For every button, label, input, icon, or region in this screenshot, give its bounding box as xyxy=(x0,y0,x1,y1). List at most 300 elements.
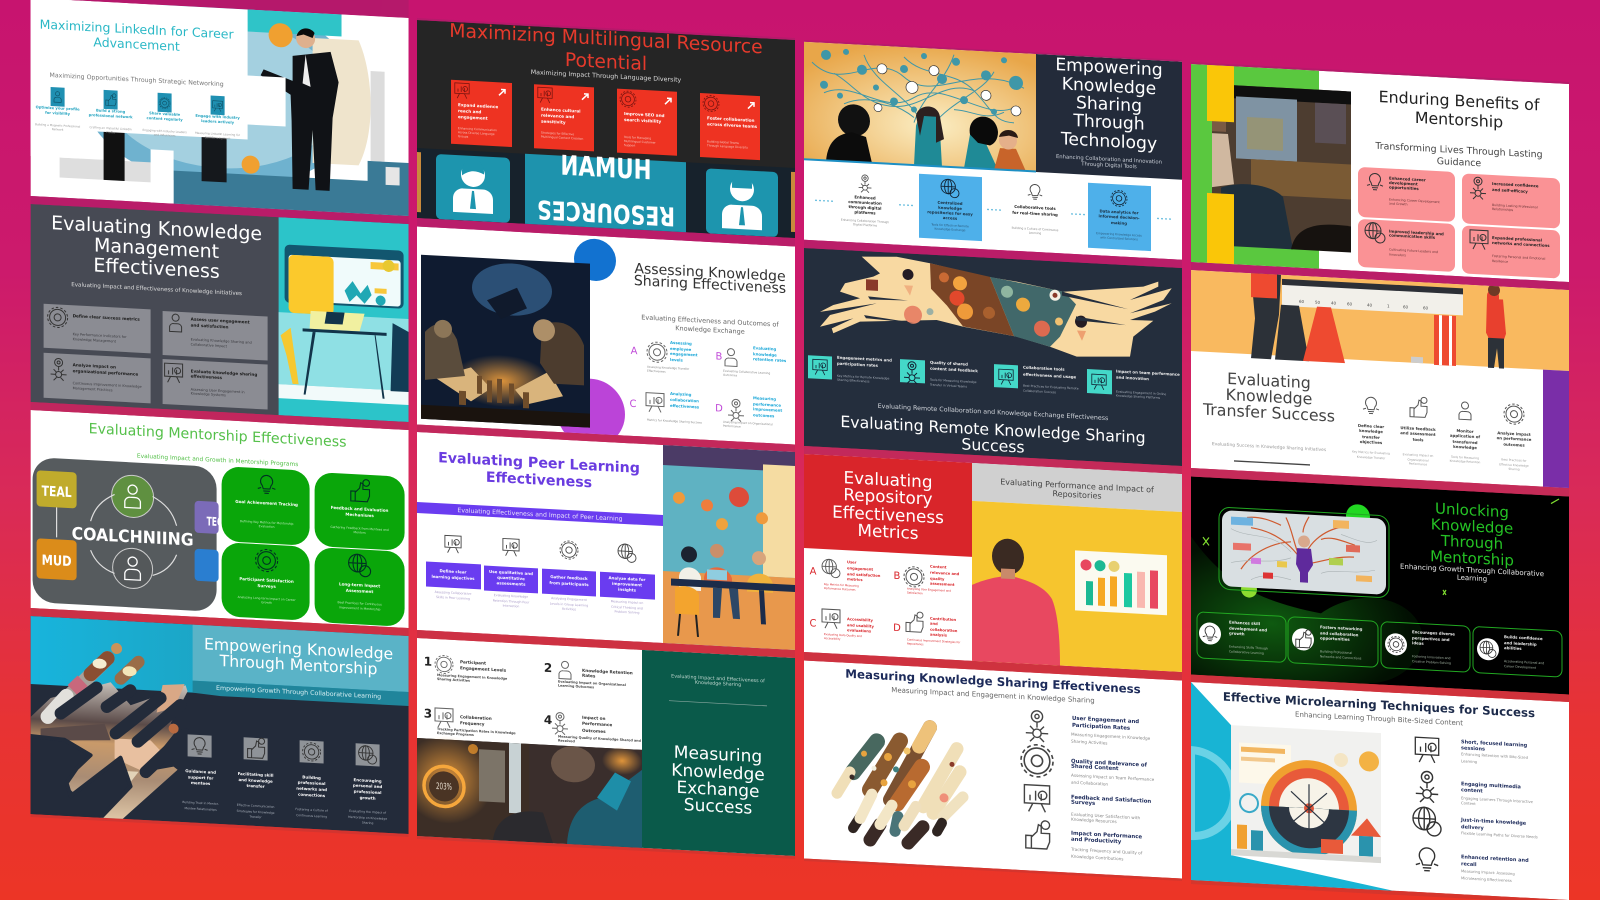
step: analysis: Critical Thinking and xyxy=(611,605,643,610)
title: Knowledge xyxy=(1226,385,1312,408)
card: leadership: Career Development xyxy=(1504,664,1537,670)
card: knowledge sharing: Knowledge Systems xyxy=(191,391,226,397)
step: objectives: knowledge xyxy=(1359,428,1383,434)
metric 4: Performance xyxy=(582,721,612,727)
step: repositories: knowledge xyxy=(938,205,962,211)
step: guidance: support for xyxy=(188,774,213,781)
metric D: D xyxy=(893,623,901,634)
step: analyze: Sharing xyxy=(1508,467,1520,471)
step: real-time tools: Learning xyxy=(1029,231,1041,235)
image: measuring ruler illustration xyxy=(1191,268,1569,375)
metric A: engagement xyxy=(847,566,873,572)
teal header xyxy=(31,616,409,704)
step: leaders xyxy=(195,95,241,141)
slide: Enduring Benefits of Mentorship xyxy=(1191,64,1569,282)
step: growth: growth xyxy=(360,795,376,801)
row: short sessions: sessions xyxy=(1461,745,1485,753)
image details xyxy=(850,744,954,803)
title: Advancement xyxy=(93,34,180,54)
card: skill development: development and xyxy=(1229,626,1267,633)
title: Maximizing LinkedIn for Career xyxy=(40,16,234,42)
card: career development: opportunities xyxy=(1389,184,1419,191)
image: coaching chalkboard: TEC xyxy=(207,514,223,529)
step: feedback xyxy=(542,540,596,612)
title xyxy=(51,212,262,285)
title: Evaluating xyxy=(844,467,932,492)
metric A: A xyxy=(810,566,817,578)
metric D: collaboration xyxy=(930,628,958,633)
metric 3: Frequency xyxy=(460,720,485,727)
title: Effective Microlearning Techniques for Success xyxy=(1223,690,1535,720)
step: objectives: Define clear xyxy=(439,568,467,575)
card: cultural relevance: sensitivity xyxy=(541,119,566,125)
step: feedback: Levels in Group Learning xyxy=(550,602,588,608)
metric 2: Evaluating Impact on Organizational xyxy=(558,679,626,687)
metric 1: Engagement Levels xyxy=(460,665,507,673)
step: skill transfer: Facilitating skill xyxy=(238,771,274,778)
metric: performance: Knowledge Sharing Platforms xyxy=(1116,394,1161,400)
step: networks: Fostering a Culture of xyxy=(295,807,329,813)
card: success metrics: Knowledge Management xyxy=(73,337,117,344)
metric D: outcomes xyxy=(753,412,775,418)
metric A: Assessing Knowledge Transfer xyxy=(647,365,690,371)
image: group study illustration xyxy=(663,445,795,650)
card: career development: and Growth xyxy=(1389,201,1408,206)
metric A xyxy=(631,338,698,375)
step: monitor xyxy=(1450,401,1481,464)
card: collaboration: Through Language Diversity xyxy=(706,143,748,150)
card: networks: Resilience xyxy=(1492,259,1508,264)
title: Effectiveness xyxy=(93,254,220,283)
metric 3: Collaboration xyxy=(460,714,492,721)
step: leaders: leaders actively xyxy=(201,119,235,125)
image: coaching chalkboard xyxy=(33,457,223,612)
step: feedback: from participants xyxy=(549,580,589,587)
magenta circle xyxy=(557,377,625,449)
slide: Evaluating Repository Effectiveness Metrics xyxy=(804,454,1182,672)
card: SEO: search visibility xyxy=(624,117,662,124)
card: perspectives: Fostering Innovation and xyxy=(1412,654,1451,660)
subtitle: Maximizing Impact Through Language Diversity xyxy=(531,69,682,84)
step: networks: Building xyxy=(302,774,321,780)
metric 1: Sharing Activities xyxy=(437,677,470,683)
step: guidance: Guidance and xyxy=(185,768,216,775)
metric A: Effectiveness xyxy=(647,369,666,374)
step: analytics: informed decision- xyxy=(1099,213,1140,220)
metric D: analysis xyxy=(930,633,948,638)
metric: performance: Evaluating Engagement in Online xyxy=(1116,390,1166,396)
step: networks xyxy=(295,740,329,819)
sparkles xyxy=(1203,480,1559,601)
card: perspectives: Creative Problem-Solving xyxy=(1412,659,1451,665)
title xyxy=(671,742,765,819)
blue circle xyxy=(574,238,616,282)
slide: Unlocking Knowledge Through Mentorship xyxy=(1191,476,1569,695)
step: monitor: knowledge xyxy=(1453,444,1477,450)
metric D: D xyxy=(715,403,723,415)
metric: collaboration tools: Best Practices for Evaluating Remote xyxy=(1023,384,1079,391)
image: coaching chalkboard: COALCHNIING xyxy=(72,524,194,551)
card: cultural relevance: relevance and xyxy=(541,113,574,119)
card: collaboration: Building Global Teams xyxy=(707,139,739,145)
card: organizational performance: organizational performance xyxy=(73,368,138,377)
metric C: Accessibility xyxy=(847,617,874,623)
row: quality: and Collaboration xyxy=(1071,780,1108,787)
metric B: Outcomes xyxy=(723,373,738,377)
card: satisfaction surveys: Analyzing Long-term Impact on Career xyxy=(238,595,296,602)
card: leadership: Accelerating Personal and xyxy=(1504,659,1544,665)
metric D: and xyxy=(930,622,938,626)
green glow blob xyxy=(1191,536,1422,687)
step: objectives xyxy=(1352,396,1390,461)
image: mind map xyxy=(1219,497,1389,605)
subtitle: Knowledge Sharing xyxy=(695,680,741,688)
card: goal tracking: Evaluation xyxy=(259,524,275,529)
slide: Measuring Knowledge Exchange Success xyxy=(401,637,795,856)
image: people and network illustration xyxy=(804,42,1036,172)
row: quality xyxy=(1021,744,1155,789)
card: SEO: Multilingual Customer xyxy=(624,139,656,145)
white text panel xyxy=(30,0,286,170)
subtitle band xyxy=(193,681,409,706)
metric B xyxy=(894,563,960,597)
step: skill transfer xyxy=(237,737,275,820)
subtitle: Measuring Impact and Engagement in Knowledge Sharing xyxy=(891,686,1095,705)
slide: Evaluating Knowledge Transfer Success xyxy=(1191,268,1569,491)
row: quality: Quality and Relevance of xyxy=(1071,759,1148,769)
step: objectives: Key Metrics for Evaluating xyxy=(1352,450,1390,456)
purple band with subtitle: Evaluating Effectiveness and Impact of Peer Learning xyxy=(457,507,623,523)
card: networks: Expanded professional xyxy=(1492,235,1542,243)
image: measuring ruler illustration: 50 xyxy=(1315,300,1321,305)
step: guidance: Building Trust in Mentor- xyxy=(182,800,219,806)
step: analysis: Problem Solving xyxy=(615,609,640,615)
card: leadership: Improved leadership and xyxy=(1389,228,1444,236)
card: career development: development xyxy=(1389,180,1418,187)
card: networking xyxy=(1288,617,1378,667)
step: real-time tools: Building a Culture of Continuous xyxy=(1012,226,1059,232)
row: multimedia: Engaging multimedia xyxy=(1461,781,1521,790)
card: networking: Fosters networking xyxy=(1320,624,1363,632)
title: Unlocking xyxy=(1435,499,1509,521)
title: Knowledge xyxy=(1062,74,1156,99)
metric A: employee xyxy=(670,346,692,352)
card: organizational performance xyxy=(44,353,151,403)
step: repositories: access xyxy=(943,215,958,221)
metric D: Repositories xyxy=(907,641,924,646)
card: cultural relevance: Strategies for Effective xyxy=(541,131,574,136)
step: analytics: with Centralized Solutions xyxy=(1100,235,1138,241)
step: communication: communication xyxy=(848,199,882,206)
row: engagement: Participation Rates xyxy=(1072,723,1130,732)
subtitle xyxy=(671,673,765,689)
row: short sessions: Short, focused learning xyxy=(1461,739,1528,749)
image: human resources blocks xyxy=(417,141,795,240)
metric: performance xyxy=(1087,367,1180,401)
step: networks: professional xyxy=(298,780,326,786)
step: analytics: Empowering Knowledge Access xyxy=(1096,231,1142,238)
title: Through Mentorship xyxy=(219,651,378,678)
step: profile xyxy=(35,86,80,133)
card: organizational performance: Management Practices xyxy=(73,386,113,392)
metric: content quality: content and feedback xyxy=(930,366,978,373)
card: leadership xyxy=(1473,626,1562,677)
slide: Measuring Knowledge Sharing Effectiveness xyxy=(804,660,1182,879)
card: leadership: Cultivating Future Leaders and xyxy=(1389,247,1438,254)
title xyxy=(1380,90,1540,130)
title xyxy=(438,450,640,494)
card: SEO: Improve SEO and xyxy=(624,111,665,118)
purple band with subtitle xyxy=(417,502,663,526)
slide: Assessing Knowledge Sharing Effectiveness xyxy=(417,226,795,458)
card: SEO xyxy=(617,89,677,156)
metric A: and satisfaction xyxy=(847,572,881,578)
metric 2: 2 xyxy=(544,661,552,675)
subtitle xyxy=(1000,477,1154,504)
row: just-in-time xyxy=(1413,807,1538,841)
metric D: performance xyxy=(753,401,781,408)
metric A: levels xyxy=(670,357,683,363)
metric: collaboration tools: Collaboration Success xyxy=(1023,389,1056,394)
card: skill development: Enhancing Skills Through xyxy=(1229,645,1268,651)
row: just-in-time: delivery xyxy=(1461,824,1484,832)
metric: collaboration tools: effectiveness and usage xyxy=(1023,372,1076,379)
slide: Empowering Knowledge Sharing Through Technology xyxy=(804,42,1182,260)
image: dashboard illustration xyxy=(279,217,409,422)
slide: Evaluating Remote Knowledge Sharing Success xyxy=(804,248,1182,466)
card: knowledge sharing: Evaluate knowledge sharing xyxy=(191,368,257,377)
dark title panel xyxy=(1036,54,1182,180)
card: organizational performance: Analyze impact on xyxy=(73,362,116,370)
card: perspectives xyxy=(1381,622,1470,672)
image: measuring ruler illustration: 60 xyxy=(1299,299,1305,304)
slide: Evaluating Mentorship Effectiveness xyxy=(31,410,409,628)
metric C: collaboration xyxy=(670,397,699,403)
metric C: evaluations xyxy=(847,628,872,634)
card: audience xyxy=(451,80,512,147)
card: knowledge sharing: Assessing User Engagement in xyxy=(191,387,245,394)
title: Evaluating Remote Knowledge Sharing xyxy=(840,412,1146,447)
card: confidence: Increased confidence xyxy=(1492,181,1539,188)
step: network xyxy=(89,89,133,135)
step: feedback: Gather feedback xyxy=(550,574,588,581)
step: content xyxy=(142,92,187,138)
step: content: Engaging with Industry Leaders xyxy=(142,128,187,134)
step: profile: for visibility xyxy=(45,111,71,116)
subtitle: Evaluating Performance and Impact of xyxy=(1000,477,1154,495)
step: objectives: Skills in Peer Learning xyxy=(436,595,470,601)
metric: engagement xyxy=(808,353,892,385)
step: profile: Building a Magnetic Professional xyxy=(35,122,80,129)
title: Management xyxy=(94,234,219,263)
metric B: relevance and xyxy=(930,571,960,576)
subtitle xyxy=(641,313,779,338)
metric D: improvement xyxy=(753,406,782,413)
metric C: C xyxy=(630,399,637,410)
step: repositories: Tools for Effective Remote xyxy=(930,222,969,228)
subtitle xyxy=(1400,563,1544,586)
step: assessments: Interaction xyxy=(503,604,519,608)
title: Measuring xyxy=(674,743,762,767)
step: monitor: Knowledge Retention xyxy=(1450,459,1481,464)
step: real-time tools: Collaborative tools xyxy=(1014,204,1056,211)
row: retention: Microlearning Effectiveness xyxy=(1461,876,1512,883)
row: retention xyxy=(1416,847,1529,884)
image: analyst with glowing dashboard xyxy=(401,733,642,848)
metric B: Evaluating xyxy=(753,345,776,352)
title: Effectiveness xyxy=(486,470,592,491)
metric C: Metrics for Knowledge Sharing Success xyxy=(647,418,702,425)
card: knowledge sharing xyxy=(163,359,268,410)
step: objectives: Knowledge Transfer xyxy=(1357,455,1386,460)
step: real-time tools xyxy=(1012,183,1059,236)
metric C: Analyzing xyxy=(670,391,692,397)
green panel xyxy=(642,650,795,856)
slide: Evaluating Knowledge Management Effectiveness xyxy=(31,204,409,422)
image: gauge illustration xyxy=(1231,725,1381,863)
metric 2: Rates xyxy=(582,673,596,678)
step: analysis: improvement xyxy=(612,581,642,587)
card: perspectives: Encourages diverse xyxy=(1412,629,1455,637)
title: Enduring Benefits of xyxy=(1379,87,1540,114)
metric A: engagement xyxy=(670,351,698,357)
metric 4: Outcomes xyxy=(582,728,606,734)
card: confidence: Building Lasting Professional xyxy=(1492,203,1538,209)
step: analyze: on performance xyxy=(1497,435,1532,442)
step: growth: Mentorship on Knowledge xyxy=(348,815,387,821)
title xyxy=(1430,499,1514,570)
step: network: Profile xyxy=(106,130,115,134)
row: just-in-time: Just-in-time knowledge xyxy=(1460,817,1527,827)
row: multimedia: content xyxy=(1461,787,1483,794)
metric 3: 3 xyxy=(424,706,432,721)
card: leadership: Innovators xyxy=(1389,252,1406,257)
step: assessments: Retention Through Peer xyxy=(493,599,530,604)
subtitle: Enhancing Learning Through Bite-Sized Content xyxy=(1295,711,1463,727)
step: feedback: Evaluating Impact on xyxy=(1403,452,1434,458)
metric C: Evaluating Data Quality and xyxy=(824,632,862,638)
metric: engagement: Key Metrics for Remote Knowledge xyxy=(837,374,889,381)
metric C: C xyxy=(810,618,817,630)
step: network: professional network xyxy=(89,113,133,119)
metric 1: Participant xyxy=(460,659,486,666)
step: network: Crafting an Impactful LinkedIn xyxy=(89,125,132,131)
card: satisfaction surveys: Growth xyxy=(261,600,272,605)
step: content: content regularly xyxy=(147,116,183,122)
metric 4: 4 xyxy=(544,713,552,727)
card: collaboration: Foster collaboration xyxy=(707,115,755,123)
step: assessments: Evaluating Knowledge xyxy=(494,593,528,599)
title xyxy=(634,261,786,297)
row: multimedia xyxy=(1416,771,1534,809)
row: short sessions: Enhancing Retention with Bite-Sized xyxy=(1461,752,1528,760)
step: growth: personal and xyxy=(353,783,382,789)
image: measuring ruler illustration: 40 xyxy=(1367,302,1373,308)
row: short sessions: Learning xyxy=(1461,759,1477,764)
card: feedback: Gathering Feedback from Mentees and xyxy=(330,525,389,532)
step: feedback: Analyzing Engagement xyxy=(551,596,588,602)
metric 1: Measuring Engagement in Knowledge xyxy=(437,673,508,681)
slide: Evaluating Peer Learning Effectiveness xyxy=(417,432,795,650)
metric C: Accessibility xyxy=(824,636,841,641)
card: leadership: Builds confidence xyxy=(1504,634,1543,641)
dots connectors xyxy=(815,199,1171,220)
metric A: metrics xyxy=(847,577,863,582)
card: success metrics xyxy=(44,304,151,353)
row: quality: Assessing Impact on Team Performance xyxy=(1071,773,1155,782)
title xyxy=(840,412,1146,463)
metric B xyxy=(716,343,787,380)
card: networks xyxy=(1462,225,1560,279)
step: objectives: Define clear xyxy=(1358,423,1384,429)
metric: content quality: Quality of shared xyxy=(930,360,968,367)
step: analytics xyxy=(1088,183,1151,251)
title: Knowledge xyxy=(1431,515,1513,538)
title: Sharing Effectiveness xyxy=(634,273,786,297)
red title panel xyxy=(804,454,972,557)
step: communication: Enhancing Collaboration Through xyxy=(841,218,889,224)
subtitle: Through Digital Tools xyxy=(1080,161,1137,170)
metric: engagement: Sharing Effectiveness xyxy=(837,378,870,383)
card: feedback xyxy=(315,472,405,551)
card: networking: Networks and Connections xyxy=(1320,654,1362,661)
step: skill transfer: and knowledge xyxy=(238,777,273,784)
card: feedback: Mechanisms xyxy=(345,512,374,518)
step: content: Share valuable xyxy=(149,111,181,117)
metric 2 xyxy=(544,660,633,691)
image: measuring ruler illustration: 1 xyxy=(1387,303,1390,309)
metric A xyxy=(810,558,881,593)
card: feedback: Mentors xyxy=(354,530,366,535)
metric: engagement: participation rates xyxy=(837,361,879,368)
title: Exchange xyxy=(676,778,760,802)
metric D xyxy=(715,393,782,431)
title: Transfer Success xyxy=(1202,400,1335,426)
step: growth: Sharing xyxy=(362,821,373,825)
image: measuring ruler illustration: 60 xyxy=(1403,304,1409,310)
card: user engagement: Evaluating Knowledge Sharing and xyxy=(191,337,252,345)
card: SEO: Support xyxy=(624,143,636,148)
title: Evaluating Knowledge xyxy=(51,212,262,245)
card: audience: Expand audience xyxy=(458,102,498,109)
row: impact xyxy=(1026,820,1143,862)
card: career development: Enhancing Career Development xyxy=(1389,197,1441,204)
card: long-term impact: Long-term Impact xyxy=(339,581,380,589)
row: retention: Enhanced retention and xyxy=(1461,854,1529,864)
metric 1: 1 xyxy=(424,654,432,669)
teal corner shape xyxy=(1191,682,1399,892)
step: feedback: Utilize feedback xyxy=(1400,425,1436,432)
image: coaching chalkboard: MUD xyxy=(42,553,72,570)
divider xyxy=(669,700,767,706)
step: growth xyxy=(348,743,387,826)
card: goal tracking xyxy=(222,466,310,546)
step: analytics: Data analytics for xyxy=(1099,208,1139,215)
decorative quote mark xyxy=(70,0,91,2)
card: confidence: Relationships xyxy=(1492,207,1514,212)
step: communication: platforms xyxy=(854,209,876,216)
card: perspectives: perspectives and xyxy=(1412,635,1450,642)
title: Potential xyxy=(565,50,647,75)
title xyxy=(204,634,393,679)
subtitle: Maximizing Opportunities Through Strategic Networking xyxy=(50,72,224,88)
lighter title panel xyxy=(193,625,409,692)
row: engagement xyxy=(1026,710,1151,748)
step: analyze xyxy=(1497,403,1532,472)
step: feedback: Organizational xyxy=(1407,457,1429,463)
metric B: B xyxy=(894,571,901,582)
title: Empowering xyxy=(1055,55,1163,81)
